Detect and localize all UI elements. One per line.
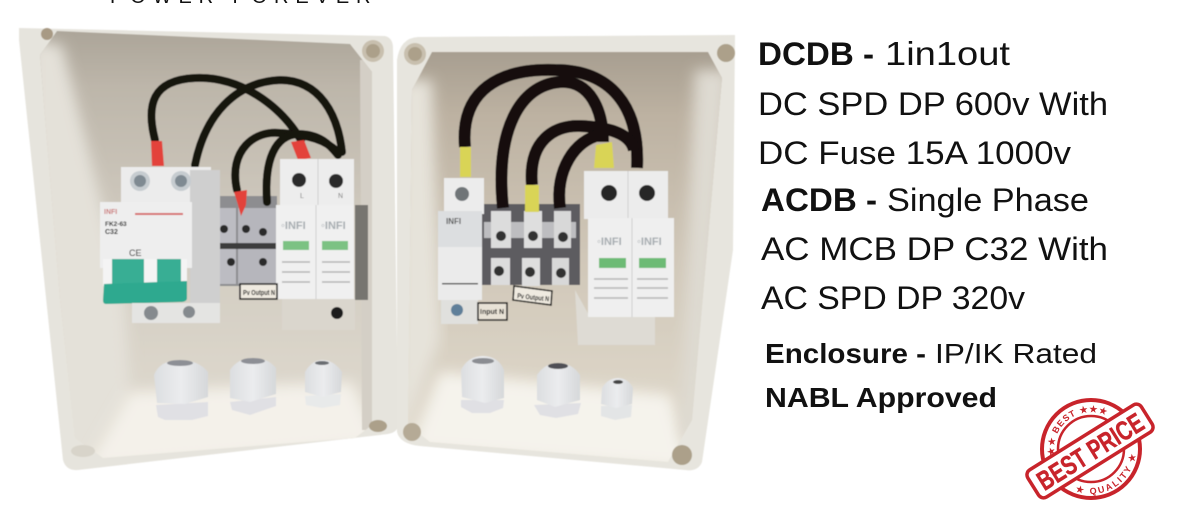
MCB breaker: CE [129,248,142,258]
labels: PV output and input: Input N [480,309,504,316]
enclosure line: IP/IK Rated [935,338,1097,369]
MCB breaker [100,167,220,323]
AC SPD modules: ◦INFI [281,220,306,232]
DC fuse line: DC Fuse 15A 1000v [758,135,1071,171]
enclosure line [765,338,1097,369]
AC MCB line: AC MCB DP C32 With [761,231,1108,267]
DC SPD line: DC SPD DP 600v With [758,86,1108,122]
DC SPD modules: ◦INFI [637,236,662,248]
left enclosure shell [19,28,398,470]
fuse holder: INFI [446,217,461,226]
ACDB heading: ACDB - [761,182,877,218]
DC SPD modules [575,171,674,345]
AC SPD modules [276,159,368,330]
terminal blocks [215,196,277,286]
cables [465,70,637,208]
panel: right enclosure (DCDB) [397,35,735,470]
icon: best price stamp [1025,398,1155,500]
icon: best price stamp: ★ QUALITY ★ [1076,454,1136,496]
AC SPD line: AC SPD DP 320v [761,280,1025,316]
DCDB heading: 1in1out [885,35,1010,72]
screw holes [41,28,387,457]
red ferrules [151,140,311,216]
enclosure line: Enclosure - [765,338,926,369]
MCB breaker: FK2-63 [105,221,127,228]
cable glands [461,356,633,420]
DC SPD modules: ◦INFI [597,236,622,248]
fuse holder [438,178,484,324]
left enclosure interior [30,25,380,470]
right enclosure interior [400,50,730,470]
icon: best price stamp: BEST PRICE [1032,407,1149,496]
photo: open enclosures [19,25,735,470]
DCDB heading [758,35,1010,72]
icon: best price stamp: ★★ BEST ★★★ [1047,405,1108,455]
ACDB heading [761,182,1089,218]
MCB breaker: INFI [104,209,117,216]
panel: left enclosure (ACDB) [19,25,398,470]
labels: PV output and input: Pv Output N [517,293,549,303]
screw holes [403,43,735,465]
cable glands [154,358,342,420]
label: PV output [240,284,277,299]
label: PV output: Pv Output N [243,290,275,297]
AC SPD modules: N [338,193,343,200]
AC SPD modules: ◦INFI [321,220,346,232]
specification text [758,35,1108,413]
cables [151,78,342,202]
MCB breaker: C32 [105,229,118,236]
right enclosure shell [397,35,735,470]
ACDB heading: Single Phase [887,182,1089,218]
labels: PV output and input [478,286,552,320]
NABL line: NABL Approved [765,382,997,413]
AC SPD modules: L [300,193,304,200]
DCDB heading: DCDB - [758,36,874,72]
yellow sleeves [460,142,614,212]
terminal blocks [480,204,580,286]
